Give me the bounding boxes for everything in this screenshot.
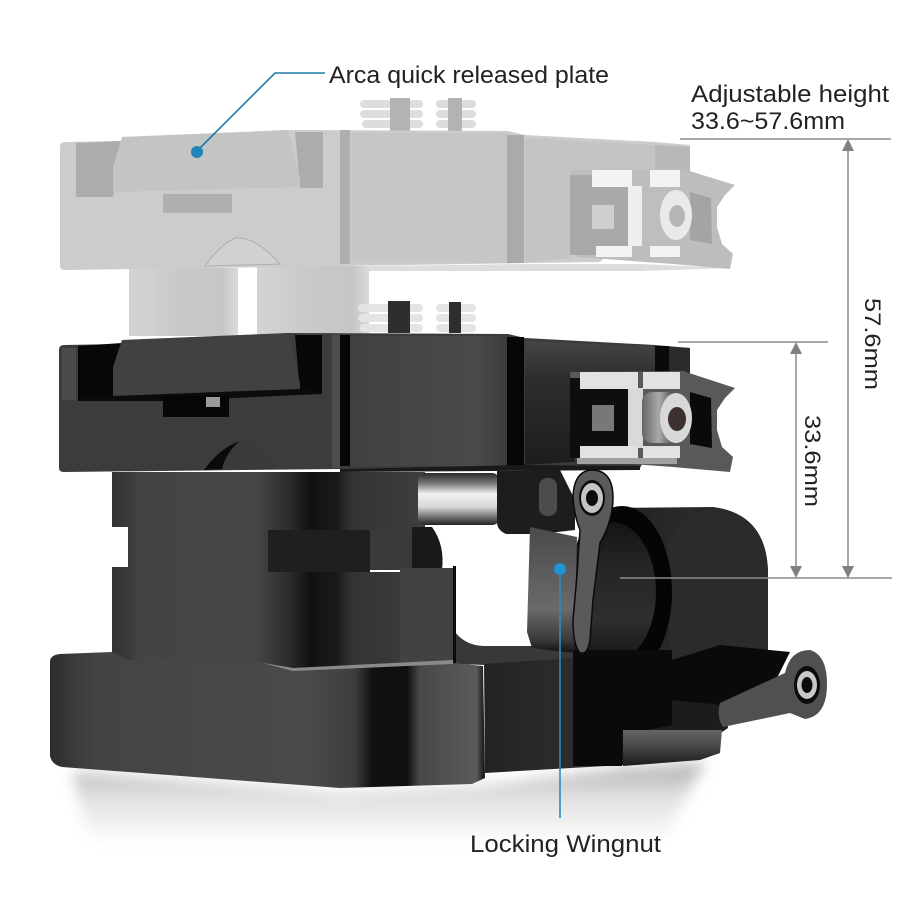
ghost arch [205, 238, 280, 266]
side clamp [570, 371, 735, 472]
ghost arca jaw [113, 130, 300, 192]
ghost plate body [60, 130, 690, 270]
adjustable height label [691, 81, 889, 135]
callout: Arca quick released plate [191, 62, 609, 158]
dark lower plate [59, 301, 735, 472]
dimension 33.6mm: 33.6mm [800, 415, 825, 507]
end block [655, 346, 690, 376]
ghost notch [163, 194, 232, 213]
ghost right panel [525, 138, 655, 262]
arca jaw [113, 333, 300, 396]
floor plate [455, 632, 580, 668]
right panel [525, 341, 655, 465]
rod collar [497, 470, 575, 534]
adjustable height label: 33.6~57.6mm [691, 108, 845, 135]
lever front face [527, 527, 577, 653]
rod clamp and wingnut [418, 470, 827, 766]
steel rod [418, 473, 500, 525]
block ring [572, 506, 672, 678]
lever head and arm [573, 470, 613, 653]
ghost screws [360, 98, 476, 131]
column [112, 472, 455, 670]
divider bar [507, 337, 524, 467]
lever bushing [579, 480, 605, 516]
ghost raised plate [60, 98, 735, 336]
base foot [50, 652, 485, 788]
foot tail [623, 730, 722, 766]
screws [358, 301, 476, 333]
ghost clamp [570, 169, 735, 269]
column slot [268, 527, 443, 572]
lower lever [672, 645, 827, 727]
callout: Arca quick released plate: Arca quick released plate [329, 62, 609, 89]
center panel [351, 336, 507, 466]
channels [78, 335, 322, 400]
dimension 57.6mm: 57.6mm [860, 298, 885, 390]
ledge under lever [622, 695, 728, 735]
black lower block [573, 650, 672, 766]
column lower right [400, 568, 453, 664]
foot top highlight [263, 660, 453, 671]
center bar [340, 335, 350, 466]
right foot chunk [484, 658, 625, 773]
notch with screw [163, 396, 229, 417]
ghost center panel [351, 133, 507, 263]
dimension 57.6mm [620, 139, 892, 578]
dark base unit [50, 472, 625, 788]
block face [667, 508, 768, 710]
ground shadow [72, 762, 705, 845]
ghost channels [76, 132, 323, 197]
clamp block [573, 507, 768, 765]
ghost posts [129, 266, 369, 336]
arch [204, 441, 281, 470]
collar bump [539, 478, 557, 516]
block bore [568, 522, 656, 662]
ghost divider bar [507, 135, 524, 263]
ghost center bar [340, 130, 350, 264]
plate body [59, 333, 690, 472]
callout: Locking Wingnut [470, 563, 661, 858]
adjustable height label: Adjustable height [691, 81, 889, 108]
dimension 33.6mm [678, 342, 828, 578]
callout: Locking Wingnut: Locking Wingnut [470, 831, 661, 858]
ghost thin lower lip [368, 264, 732, 271]
ghost end block [655, 145, 690, 172]
